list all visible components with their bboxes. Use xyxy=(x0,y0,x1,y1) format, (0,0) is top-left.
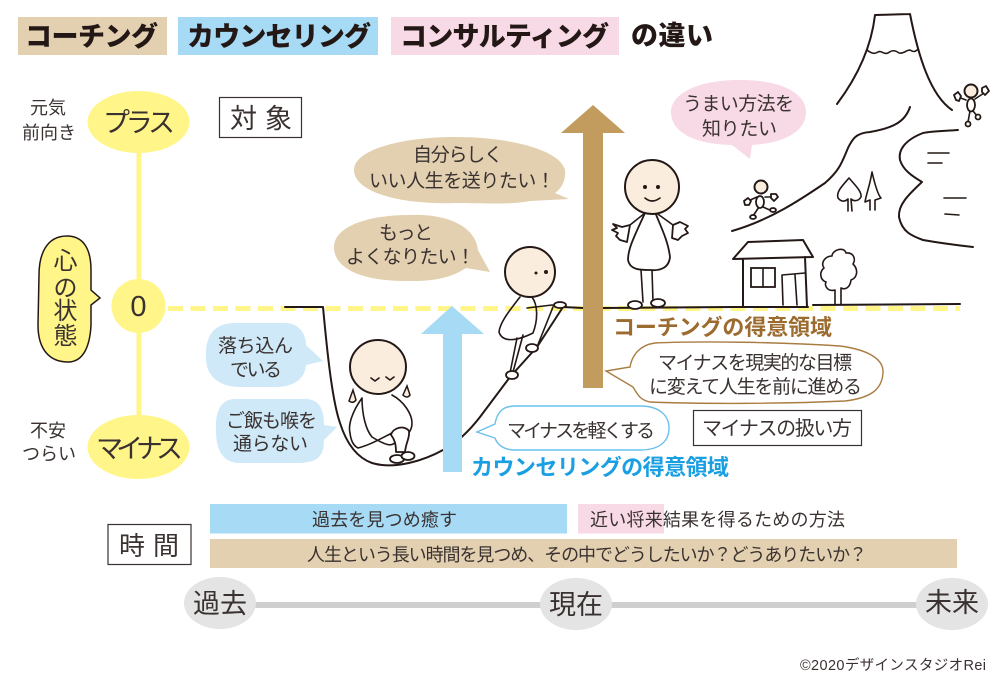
label box: target: 対 象 xyxy=(230,104,292,134)
bar: counseling past xyxy=(210,504,567,534)
speech bubble: want to improve xyxy=(334,215,490,281)
bar: counseling past: 過去を見つめ癒す xyxy=(312,510,457,530)
figure: small person at summit xyxy=(954,84,989,126)
title: の違い xyxy=(631,21,713,51)
callout: move life forward: に変えて人生を前に進める xyxy=(649,376,862,398)
label box: target xyxy=(220,98,302,138)
speech bubble: want to improve: よくなりたい！ xyxy=(346,247,475,268)
bar: consulting near future xyxy=(578,504,845,534)
label: minus state xyxy=(22,421,76,464)
speech bubble: be yourself xyxy=(354,137,569,204)
callout: heart state: 心 xyxy=(54,248,78,275)
illustration: house xyxy=(733,240,813,307)
vertical axis: heart state: プラス xyxy=(103,108,175,138)
speech bubble: want to improve: もっと xyxy=(379,223,433,244)
ground line with pit xyxy=(285,304,960,465)
speech bubble: cannot eat: 通らない xyxy=(233,433,308,455)
bar: coaching whole life xyxy=(210,539,957,568)
speech bubble: want better method xyxy=(671,80,806,159)
callout: heart state: 態 xyxy=(54,323,78,350)
label: minus state: 不安 xyxy=(30,421,66,441)
speech bubble: cannot eat xyxy=(216,399,337,463)
heading: coaching specialty: コーチングの得意領域 xyxy=(613,315,832,340)
speech bubble: cannot eat: ご飯も喉を xyxy=(226,410,317,432)
callout: lighten the minus xyxy=(477,406,669,450)
heading: counseling specialty: カウンセリングの得意領域 xyxy=(471,455,729,480)
illustration: mountain xyxy=(732,14,973,247)
speech bubble: depressed: でいる xyxy=(230,360,282,381)
copyright: ©2020デザインスタジオRei xyxy=(800,656,986,674)
bar: coaching whole life: 人生という長い時間を見つめ、その中でどうしたいか？どうありたいか？ xyxy=(307,545,867,565)
callout: move life forward: マイナスを現実的な目標 xyxy=(658,352,852,374)
timeline: 過去 xyxy=(193,589,247,619)
speech bubble: want better method: 知りたい xyxy=(702,118,777,140)
speech bubble: be yourself: いい人生を送りたい！ xyxy=(369,170,555,192)
vertical axis: heart state: マイナス xyxy=(96,434,183,464)
label: plus state: 前向き xyxy=(22,123,76,143)
label: plus state: 元気 xyxy=(30,98,66,118)
label box: time xyxy=(108,524,191,564)
figure: small hiker xyxy=(744,180,778,219)
dashed zero line xyxy=(168,306,960,311)
callout: move life forward xyxy=(606,342,883,403)
title: コンサルティング xyxy=(400,21,609,52)
vertical axis: heart state: 0 xyxy=(130,291,147,323)
figure: climbing person xyxy=(499,247,566,379)
timeline: 未来 xyxy=(925,588,979,618)
speech bubble: want better method: うまい方法を xyxy=(683,93,794,115)
title xyxy=(18,17,713,55)
speech bubble: be yourself: 自分らしく xyxy=(413,144,503,166)
label: minus state: つらい xyxy=(22,444,76,464)
callout: lighten the minus: マイナスを軽くする xyxy=(507,420,655,442)
callout: heart state: の xyxy=(54,275,78,302)
title: コーチング xyxy=(25,21,158,52)
timeline: 現在 xyxy=(549,590,603,620)
label box: handling minus xyxy=(694,410,862,446)
figure: standing person xyxy=(612,160,688,309)
title: カウンセリング xyxy=(187,21,371,52)
arrow: coaching xyxy=(561,105,625,388)
arrow: counseling xyxy=(421,306,484,472)
speech bubble: depressed: 落ち込ん xyxy=(218,335,293,357)
timeline xyxy=(184,577,988,630)
bar: consulting near future: 近い将来結果を得るための方法 xyxy=(590,510,845,530)
callout: heart state xyxy=(38,236,100,362)
vertical axis: heart state xyxy=(88,91,960,479)
callout: heart state: 状 xyxy=(54,298,78,325)
speech bubble: depressed xyxy=(206,323,323,387)
label box: time: 時 間 xyxy=(119,531,179,561)
illustration: trees xyxy=(821,172,881,305)
figure: crouching person xyxy=(349,340,414,463)
label: plus state xyxy=(22,98,76,143)
label box: handling minus: マイナスの扱い方 xyxy=(702,417,852,440)
